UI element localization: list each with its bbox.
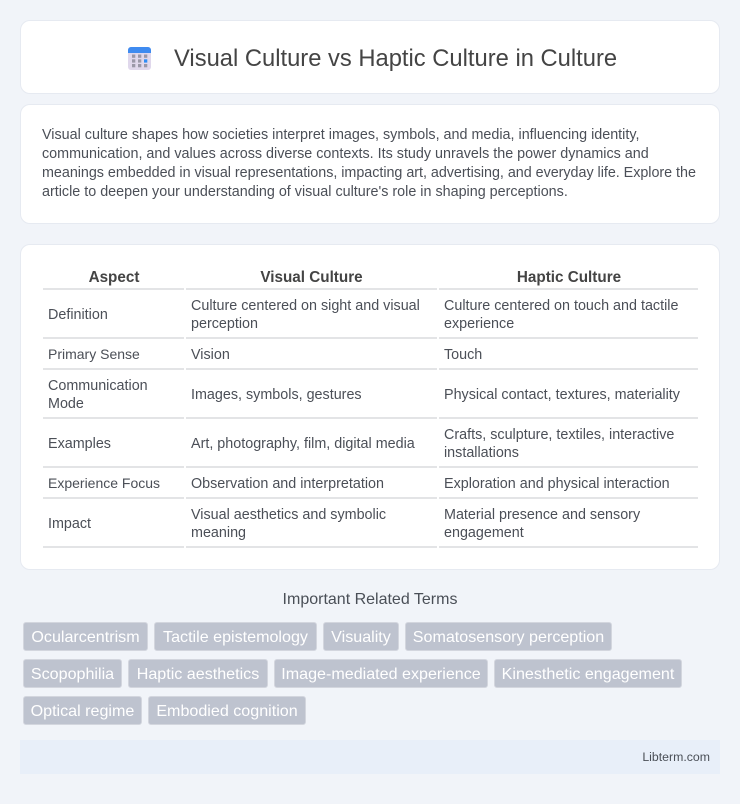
table header: Haptic Culture (517, 269, 621, 286)
row: communication mode: Physical contact, textures, materiality (444, 387, 680, 403)
row: communication mode: Mode (48, 396, 84, 412)
row: primary sense: Touch (444, 347, 482, 363)
related terms tags: Ocularcentrism (31, 628, 140, 646)
row: communication mode: Images, symbols, gestures (191, 387, 362, 403)
row: experience focus: Observation and interpretation (191, 476, 384, 492)
related terms tags: Scopophilia (31, 665, 114, 683)
row: definition: Culture centered on sight and visual (191, 298, 420, 314)
intro text: article to deepen your understanding of visual culture's role in shaping perceptions. (42, 184, 568, 200)
row: primary sense: Primary Sense (48, 346, 140, 362)
table header: Aspect (89, 269, 139, 286)
related terms tags: Optical regime (31, 702, 134, 720)
row: definition: Culture centered on touch and tactile (444, 298, 678, 314)
related terms tags: Kinesthetic engagement (502, 665, 674, 683)
row: impact: Impact (48, 516, 91, 532)
related terms tags: Embodied cognition (156, 702, 298, 720)
row: impact: meaning (191, 525, 246, 541)
row: primary sense: Vision (191, 347, 230, 363)
related terms tags: Tactile epistemology (163, 628, 308, 646)
row: definition: Definition (48, 307, 108, 323)
row: experience focus: Experience Focus (48, 475, 160, 491)
related terms tags: Image-mediated experience (281, 665, 481, 683)
footer (20, 740, 720, 774)
row: communication mode: Communication (48, 378, 148, 394)
row: examples (48, 427, 674, 461)
icon: calendar (128, 47, 151, 70)
related terms tags: Somatosensory perception (413, 628, 604, 646)
row: primary sense (48, 346, 482, 363)
row: impact: Material presence and sensory (444, 507, 640, 523)
row: impact: engagement (444, 525, 524, 541)
related terms heading: Important Related Terms (283, 591, 457, 608)
intro panel (20, 104, 720, 224)
row: examples: Examples (48, 436, 111, 452)
comparison table panel (20, 244, 720, 570)
table header: Visual Culture (260, 269, 363, 286)
title: Visual Culture vs Haptic Culture in Culture (174, 45, 617, 72)
row: definition: perception (191, 316, 258, 332)
intro text: Visual culture shapes how societies interpret images, symbols, and media, influencing identity, (42, 127, 639, 143)
row: impact (48, 507, 640, 541)
footer credit: Libterm.com (642, 750, 710, 764)
row: experience focus: Exploration and physical interaction (444, 476, 670, 492)
row: examples: installations (444, 445, 519, 461)
row: examples: Crafts, sculpture, textiles, interactive (444, 427, 674, 443)
comparison table (43, 269, 698, 548)
intro text: communication, and values across diverse contexts. Its study unravels the power dynamics and (42, 146, 649, 162)
row: experience focus (48, 475, 670, 492)
intro text (42, 127, 696, 200)
header panel (20, 20, 720, 94)
row: impact: Visual aesthetics and symbolic (191, 507, 386, 523)
related terms tags: Haptic aesthetics (137, 665, 259, 683)
related terms tags: Visuality (331, 628, 391, 646)
table header (89, 269, 621, 286)
row: examples: Art, photography, film, digital media (191, 436, 415, 452)
related terms tags (23, 622, 682, 725)
row: definition: experience (444, 316, 514, 332)
row: communication mode (48, 378, 680, 412)
intro text: meanings embedded in visual representations, impacting art, advertising, and everyday life. Explore the (42, 165, 696, 181)
row: definition (48, 298, 678, 332)
